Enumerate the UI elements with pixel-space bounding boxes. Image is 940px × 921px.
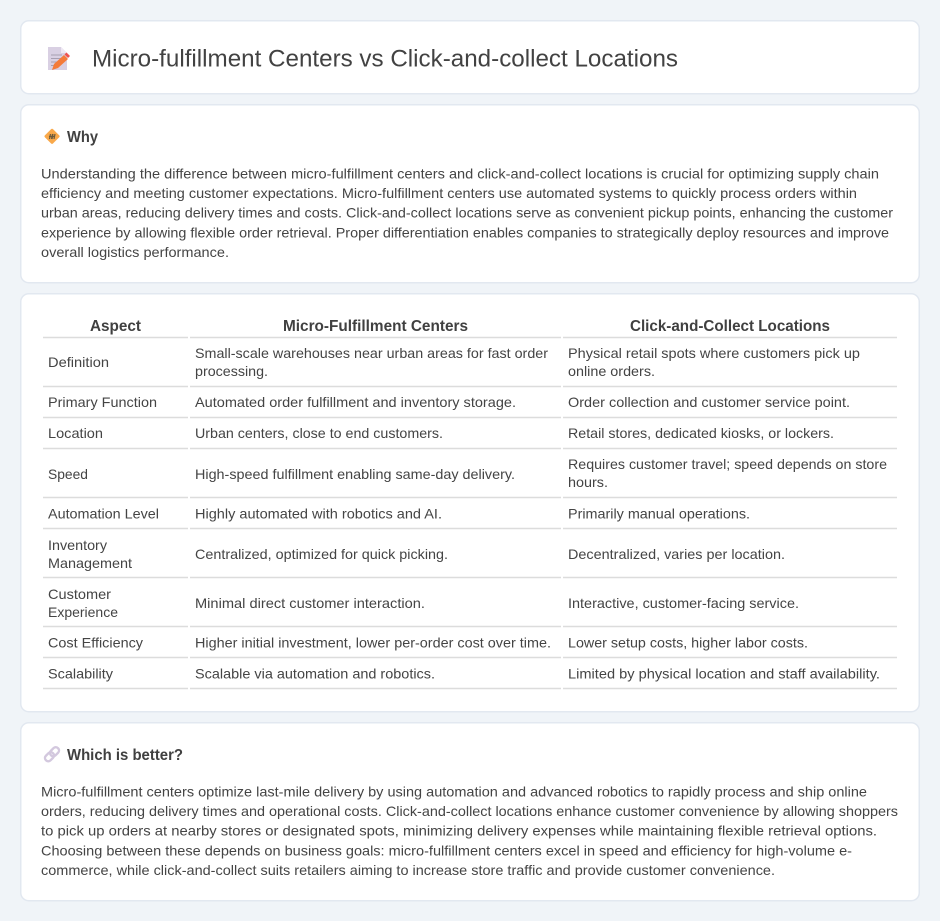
row: scalability [43, 666, 897, 688]
row: inventory management: Centralized, optimized for quick picking. [195, 547, 448, 562]
row: cost efficiency: Higher initial investment, lower per-order cost over time. [195, 636, 551, 650]
text block: why: overall logistics performance. [41, 245, 229, 260]
icon: link [44, 746, 60, 763]
icon: document with pencil [48, 47, 70, 70]
row: customer experience: Interactive, customer-facing service. [568, 596, 799, 611]
row: location: Location [48, 426, 103, 441]
icon: warning diamond [44, 128, 60, 144]
text block: which is better: to pick up orders at nearby stores or designated spots, minimizing delivery expenses while maintaining flexible retrieval options. [41, 824, 877, 839]
panel: comparison table [21, 294, 919, 712]
text block: why: Understanding the difference between micro-fulfillment centers and click-and-collect locations is crucial for optimizing supply chain [41, 166, 879, 182]
title: Micro-fulfillment Centers vs Click-and-collect Locations [92, 46, 678, 72]
row: definition: Definition [48, 355, 109, 370]
row: speed [43, 457, 897, 498]
row: customer experience [43, 587, 897, 626]
table header: Click-and-Collect Locations [630, 318, 830, 335]
row: inventory management: Management [48, 556, 132, 571]
row: inventory management: Inventory [48, 538, 107, 553]
row: primary function: Primary Function [48, 395, 157, 410]
row: definition: online orders. [568, 364, 655, 379]
row: speed: Speed [48, 467, 88, 482]
table header: Micro-Fulfillment Centers [283, 318, 468, 335]
text block: why [41, 166, 893, 260]
row: definition [43, 346, 897, 386]
row: definition: Physical retail spots where customers pick up [568, 346, 860, 361]
panel: which is better [21, 723, 919, 901]
text block: why: urban areas, reducing delivery times and costs. Click-and-collect locations serve as convenient pickup points, enhancing the customer [41, 206, 893, 221]
text block: which is better: commerce, while click-and-collect suits retailers aiming to increase store traffic and provide customer convenience. [41, 863, 775, 878]
row: location: Retail stores, dedicated kiosks, or lockers. [568, 426, 834, 441]
row: location: Urban centers, close to end customers. [195, 426, 443, 441]
row: inventory management: Decentralized, varies per location. [568, 547, 785, 562]
row: cost efficiency: Cost Efficiency [48, 636, 143, 650]
heading: why: Why [67, 129, 98, 146]
row: scalability: Limited by physical location and staff availability. [568, 666, 880, 682]
text block: why: efficiency and meeting customer expectations. Micro-fulfillment centers use automated systems to quickly process orders within [41, 186, 857, 201]
row: definition: Small-scale warehouses near urban areas for fast order [195, 346, 548, 361]
row: automation level: Highly automated with robotics and AI. [195, 506, 442, 522]
table header [43, 318, 897, 338]
row: scalability: Scalable via automation and robotics. [195, 666, 435, 682]
row: primary function [43, 395, 897, 418]
row: speed: hours. [568, 475, 608, 490]
heading: which is better: Which is better? [67, 747, 183, 764]
row: customer experience: Customer [48, 587, 112, 602]
row: scalability: Scalability [48, 666, 113, 682]
text block: why: experience by allowing flexible order retrieval. Proper differentiation enables companies to strategically deploy resources and improve [41, 225, 889, 240]
row: primary function: Automated order fulfillment and inventory storage. [195, 395, 516, 410]
text block: which is better: orders, reducing delivery times and operational costs. Click-and-collect locations enhance customer convenience by allowing shoppers [41, 804, 898, 819]
row: automation level: Automation Level [48, 506, 159, 522]
text block: which is better: Choosing between these depends on business goals: micro-fulfillment centers excel in speed and efficiency for high-volume e- [41, 843, 852, 858]
row: location [43, 426, 897, 448]
panel: why [21, 105, 919, 283]
row: speed: Requires customer travel; speed depends on store [568, 457, 887, 472]
row: cost efficiency: Lower setup costs, higher labor costs. [568, 636, 808, 650]
row: primary function: Order collection and customer service point. [568, 395, 850, 410]
row: definition: processing. [195, 364, 268, 379]
text block: which is better: Micro-fulfillment centers optimize last-mile delivery by using automation and advanced robotics to rapidly process and ship online [41, 784, 867, 800]
row: customer experience: Minimal direct customer interaction. [195, 596, 425, 611]
panel: header [21, 21, 919, 94]
row: cost efficiency [43, 636, 897, 658]
text block: which is better [41, 784, 898, 878]
table header: Aspect [90, 318, 141, 335]
row: speed: High-speed fulfillment enabling same-day delivery. [195, 467, 515, 482]
row: automation level: Primarily manual operations. [568, 506, 750, 522]
row: automation level [43, 506, 897, 528]
row: customer experience: Experience [48, 605, 118, 620]
row: inventory management [43, 538, 897, 578]
